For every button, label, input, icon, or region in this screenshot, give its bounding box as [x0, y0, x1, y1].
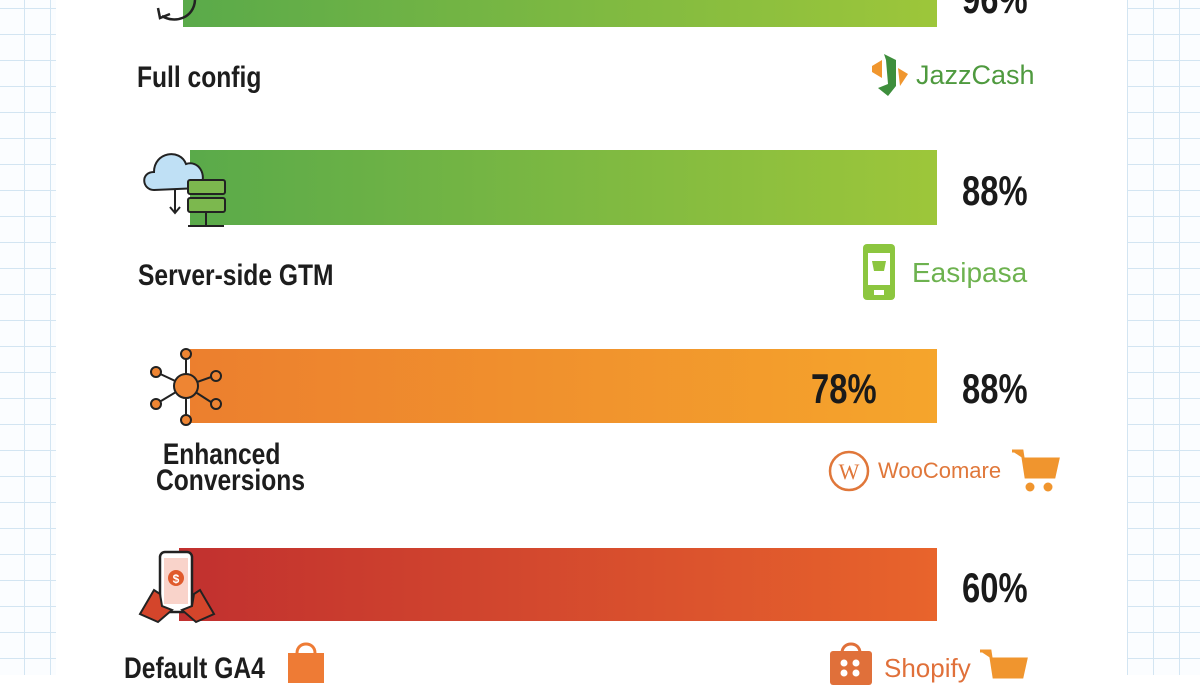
logo: WooComare: [828, 450, 1060, 492]
pct 2: 88%: [962, 167, 1028, 214]
icon: cloud server: [143, 153, 226, 227]
icon: shopping bag: [288, 642, 324, 683]
logo: WooComare: WooComare: [878, 458, 1001, 483]
label: Server-side GTM: Server-side GTM: [138, 259, 334, 292]
logo: JazzCash: [872, 54, 1035, 96]
pct in-bar 78%: 78%: [811, 365, 877, 412]
grid paper right: [1127, 0, 1200, 675]
bar 3: Enhanced Conversions: [190, 349, 937, 423]
pct 3: 88%: [962, 365, 1028, 412]
label: Enhanced Conversions: [156, 438, 305, 496]
logo: WooComare: W: [839, 459, 860, 484]
bar 2: Server-side GTM: [190, 150, 937, 225]
grid paper left: [0, 0, 56, 675]
pct 4: 60%: [962, 564, 1028, 611]
logo: Easipasa: [863, 244, 1028, 300]
logo: JazzCash: JazzCash: [916, 60, 1035, 90]
label: Full config: Full config: [137, 61, 261, 94]
bar 4: Default GA4: [179, 548, 937, 621]
icon: phone in hands: $: [173, 572, 180, 586]
icon: refresh arrows: [156, 0, 196, 21]
bar 1: Full config: [183, 0, 937, 27]
label: Enhanced Conversions: Enhanced: [163, 438, 280, 471]
label: Default GA4: Default GA4: [124, 652, 265, 685]
label: Enhanced Conversions: Conversions: [156, 464, 305, 496]
icon: phone in hands: [138, 550, 216, 624]
logo: Shopify: Shopify: [884, 653, 971, 683]
icon: network hub: [150, 348, 222, 426]
logo: Shopify: [830, 642, 1028, 685]
logo: Easipasa: Easipasa: [912, 257, 1027, 288]
